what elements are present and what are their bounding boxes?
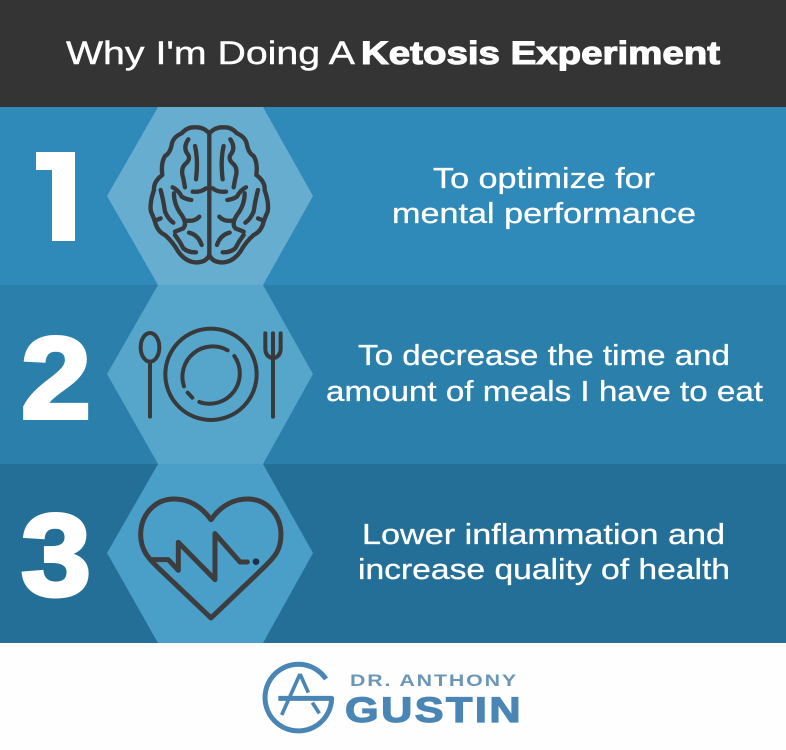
panel: reason 3 xyxy=(0,464,786,643)
header panel xyxy=(0,0,786,107)
logo: Dr. Anthony Gustin xyxy=(265,664,523,731)
title xyxy=(66,35,720,71)
logo name: DR. ANTHONY xyxy=(350,671,518,690)
icon: plate and cutlery xyxy=(141,329,281,420)
reason 3 text: increase quality of health xyxy=(358,554,730,586)
reason 2 text: To decrease the time and xyxy=(358,340,730,372)
title: Why I'm Doing A xyxy=(66,35,356,71)
reason 3 text: Lower inflammation and xyxy=(362,519,725,551)
title: Ketosis Experiment xyxy=(361,35,720,71)
number 3: 3 xyxy=(21,490,91,620)
reason 2 text: amount of meals I have to eat xyxy=(326,376,763,408)
icon: heart with pulse xyxy=(141,499,281,618)
reason 1 text xyxy=(392,163,696,230)
reason 3 text xyxy=(358,519,730,586)
reason 2 text xyxy=(326,340,763,408)
logo: Dr. Anthony Gustin: GUSTIN xyxy=(345,691,523,730)
logo mark xyxy=(265,664,332,731)
hexagon 2 xyxy=(107,285,313,464)
number 1: 1 xyxy=(30,130,99,268)
hexagon 1 xyxy=(107,107,313,285)
reason 1 text: mental performance xyxy=(392,198,696,230)
panel: reason 2 xyxy=(0,285,786,464)
panel: reason 1 xyxy=(0,107,786,285)
icon: brain xyxy=(151,127,268,262)
number 2: 2 xyxy=(21,313,91,443)
number 1 xyxy=(36,152,75,241)
reason 1 text: To optimize for xyxy=(433,163,655,195)
hexagon 3 xyxy=(107,464,313,643)
